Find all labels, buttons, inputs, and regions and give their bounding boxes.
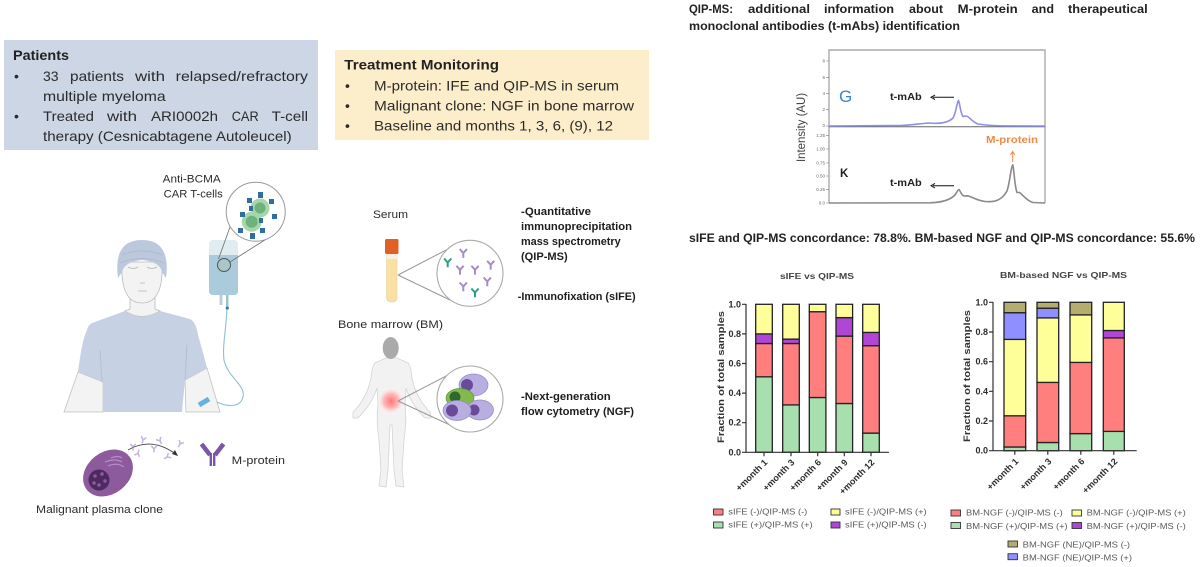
label: anti-BCMA CAR T-cells <box>163 174 223 201</box>
chart: mass spectrum G and K traces: 1.00 <box>816 146 825 152</box>
chart: mass spectrum G and K traces: 0.75 <box>816 160 825 166</box>
chart title: sIFE vs QIP-MS <box>780 271 854 281</box>
trace: K <box>829 165 1045 203</box>
chart: mass spectrum G and K traces: 0.0 <box>819 200 825 206</box>
panel: treatment monitoring <box>335 50 649 140</box>
chart: BM-based NGF vs QIP-MS stacked bars: 0.8 <box>975 327 988 337</box>
text block: patient list: ARI0002h <box>151 108 218 124</box>
label: t-mAb G: t-mAb <box>890 92 922 103</box>
chart: BM-based NGF vs QIP-MS stacked bars: 0.6 <box>975 357 988 367</box>
chart: sIFE vs QIP-MS stacked bars: +month 6 <box>788 457 823 493</box>
label: M-protein arrow <box>986 135 1038 162</box>
chart: BM-based NGF vs QIP-MS stacked bars: +month 6 <box>1051 456 1086 492</box>
legend: BM-based NGF vs QIP-MS: BM-NGF (+)/QIP-MS (-) <box>1087 521 1186 531</box>
text block: patient list: patients <box>70 68 124 84</box>
legend: sIFE vs QIP-MS: sIFE (+)/QIP-MS (-) <box>845 520 927 530</box>
chart: sIFE vs QIP-MS stacked bars: 1.0 <box>728 299 741 309</box>
chart: BM-based NGF vs QIP-MS stacked bars: 0.4 <box>975 386 988 396</box>
chart: mass spectrum G and K traces: 0.50 <box>816 174 825 178</box>
text block: monitoring list: M-protein: IFE and QIP-MS in serum <box>374 78 619 94</box>
text block: monitoring list: • <box>345 78 350 94</box>
chart: sIFE vs QIP-MS stacked bars: +month 9 <box>814 457 850 493</box>
legend: BM-based NGF vs QIP-MS: BM-NGF (-)/QIP-MS (-) <box>966 508 1063 518</box>
chart: sIFE vs QIP-MS stacked bars: +month 3 <box>761 457 796 493</box>
text block: QIP-MS and sIFE methods: -Quantitative <box>521 206 591 218</box>
chart: mass spectrum G and K traces: Intensity (AU) <box>796 93 808 162</box>
label: serum: Serum <box>373 209 408 221</box>
panel: patients <box>4 40 318 150</box>
legend: sIFE vs QIP-MS: sIFE (+)/QIP-MS (+) <box>728 520 813 530</box>
chart: sIFE vs QIP-MS stacked bars: 0.8 <box>728 329 741 339</box>
chart: mass spectrum G and K traces: 1.25 <box>816 133 825 138</box>
text block: patient list: CAR <box>232 108 259 124</box>
text block: NGF method: -Next-generation <box>521 391 611 403</box>
illustration: patient receiving infusion <box>64 182 285 412</box>
text block: monitoring list <box>345 78 635 134</box>
chart: BM-based NGF vs QIP-MS stacked bars: 0.0 <box>975 446 988 456</box>
illustration: malignant plasma clone <box>74 436 184 506</box>
chart: mass spectrum G and K traces: 4 <box>822 91 825 96</box>
chart: mass spectrum G and K traces: 8 <box>822 58 825 64</box>
chart: BM-based NGF vs QIP-MS stacked bars: 1.0 <box>975 297 988 307</box>
label: anti-BCMA CAR T-cells: CAR T-cells <box>164 189 223 201</box>
title: QIP-MS additional information: and <box>1032 2 1054 16</box>
chart: mass spectrum G and K traces: 2 <box>822 107 825 112</box>
text block: patient list: therapy (Cesnicabtagene Autoleucel) <box>43 128 292 144</box>
text block: monitoring list: Baseline and months 1, 3, 6, (9), 12 <box>374 118 613 134</box>
legend: sIFE vs QIP-MS: sIFE (-)/QIP-MS (-) <box>728 506 807 516</box>
title: QIP-MS additional information: additional <box>748 2 810 16</box>
label: anti-BCMA CAR T-cells: Anti-BCMA <box>163 174 221 186</box>
text block: monitoring list: • <box>345 118 350 134</box>
text block: patient list: relapsed/refractory <box>176 68 308 84</box>
text block: patient list: • <box>14 68 19 84</box>
label: malignant plasma clone: Malignant plasma clone <box>36 504 163 516</box>
text block: patient list <box>14 68 308 144</box>
chart: sIFE vs QIP-MS stacked bars <box>714 271 927 530</box>
label: M-protein: M-protein <box>232 455 285 467</box>
chart: sIFE vs QIP-MS stacked bars: +month 1 <box>734 457 769 493</box>
chart: mass spectrum G and K traces <box>796 50 1045 206</box>
text block: patient list: with <box>106 108 137 124</box>
legend: BM-based NGF vs QIP-MS: BM-NGF (NE)/QIP-MS (+) <box>1023 552 1132 562</box>
title: QIP-MS additional information: QIP-MS: <box>689 2 733 16</box>
label: bone marrow: Bone marrow (BM) <box>338 319 443 331</box>
icon: M-protein antibody <box>202 444 224 466</box>
chart: sIFE vs QIP-MS stacked bars: Fraction of total samples <box>716 311 727 443</box>
text block: patient list: 33 <box>43 68 59 84</box>
text block: monitoring list: • <box>345 98 350 114</box>
title: QIP-MS additional information: about <box>909 2 943 16</box>
title: QIP-MS additional information: therapeutical <box>1068 2 1148 16</box>
chart: sIFE vs QIP-MS stacked bars: 0.6 <box>728 358 741 368</box>
label: t-mAb K: t-mAb <box>890 178 922 189</box>
chart: BM-based NGF vs QIP-MS stacked bars <box>951 270 1186 562</box>
legend: sIFE vs QIP-MS <box>714 506 927 530</box>
text block: QIP-MS and sIFE methods <box>518 206 636 303</box>
heading: concordance: sIFE and QIP-MS concordance: 78.8%. BM-based NGF and QIP-MS concordance: 55.6% <box>689 231 1195 245</box>
trace: G <box>829 100 1045 126</box>
legend: BM-based NGF vs QIP-MS: BM-NGF (-)/QIP-MS (+) <box>1087 508 1186 518</box>
text block: patient list: with <box>134 68 165 84</box>
chart: sIFE vs QIP-MS stacked bars: +month 12 <box>837 457 876 496</box>
label: M-protein arrow: M-protein <box>986 135 1038 146</box>
zoom circle: serum antibodies <box>398 240 503 306</box>
chart: BM-based NGF vs QIP-MS stacked bars: +month 12 <box>1080 456 1119 495</box>
zoom circle: bone marrow cells <box>398 366 503 432</box>
text block: NGF method <box>521 391 634 418</box>
chart: mass spectrum G and K traces: 6 <box>822 75 825 80</box>
label: G: G <box>839 87 852 106</box>
chart: mass spectrum G and K traces: 0 <box>822 123 825 128</box>
chart: BM-based NGF vs QIP-MS stacked bars: 0.2 <box>975 416 988 426</box>
text block: NGF method: flow cytometry (NGF) <box>521 406 634 418</box>
legend: BM-based NGF vs QIP-MS <box>951 508 1186 562</box>
label: t-mAb K <box>890 178 954 189</box>
chart: mass spectrum G and K traces: 0.25 <box>816 187 825 192</box>
text block: QIP-MS and sIFE methods: -Immunofixation (sIFE) <box>518 291 636 303</box>
chart: sIFE vs QIP-MS stacked bars: 0.2 <box>728 418 741 428</box>
label: K: K <box>840 168 849 180</box>
icon: serum tube <box>385 239 398 302</box>
label: t-mAb G <box>890 92 954 103</box>
chart: BM-based NGF vs QIP-MS stacked bars: +month 1 <box>985 456 1020 492</box>
text block: QIP-MS and sIFE methods: mass spectrometry <box>521 236 622 248</box>
legend: sIFE vs QIP-MS: sIFE (-)/QIP-MS (+) <box>845 506 927 516</box>
title: QIP-MS additional information <box>689 2 1148 33</box>
text block: patient list: multiple myeloma <box>43 88 166 104</box>
icon: human body with bone marrow site <box>353 337 431 487</box>
title: QIP-MS additional information: information <box>824 2 894 16</box>
text block: patient list: T-cell <box>272 108 308 124</box>
title: QIP-MS additional information: M-protein <box>958 2 1018 16</box>
text block: patient list: Treated <box>43 108 94 124</box>
text block: monitoring list: Malignant clone: NGF in bone marrow <box>374 98 635 114</box>
text block: QIP-MS and sIFE methods: immunoprecipitation <box>521 221 632 233</box>
chart: sIFE vs QIP-MS stacked bars: 0.4 <box>728 388 741 398</box>
text block: QIP-MS and sIFE methods: (QIP-MS) <box>521 251 568 263</box>
text block: patient list: • <box>14 108 19 124</box>
title: QIP-MS additional information: monoclonal antibodies (t-mAbs) identification <box>689 19 960 33</box>
legend: BM-based NGF vs QIP-MS: BM-NGF (+)/QIP-MS (+) <box>966 521 1068 531</box>
chart: BM-based NGF vs QIP-MS stacked bars: +month 3 <box>1018 456 1053 492</box>
chart: BM-based NGF vs QIP-MS stacked bars: Fraction of total samples <box>962 310 973 442</box>
chart: sIFE vs QIP-MS stacked bars: 0.0 <box>728 447 741 457</box>
heading: treatment monitoring: Treatment Monitoring <box>344 56 499 72</box>
legend: BM-based NGF vs QIP-MS: BM-NGF (NE)/QIP-MS (-) <box>1023 540 1130 550</box>
chart title: BM-based NGF vs QIP-MS <box>1000 270 1127 280</box>
heading: patients: Patients <box>13 47 69 63</box>
